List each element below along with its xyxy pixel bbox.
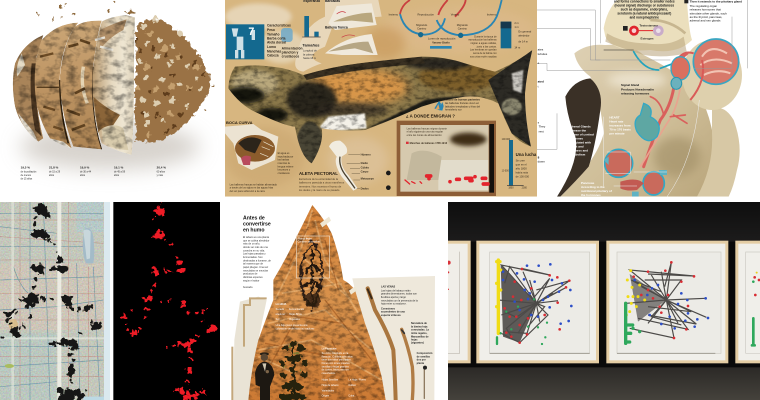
bread percentage labels: de 30 a 44 <box>80 172 92 174</box>
leaf text block: la floración: Flores con tonos rosados, <box>322 362 351 365</box>
intro text: mezcladas se mezclan <box>243 269 269 272</box>
framed map with sightings: Las ballenas francas migran durante <box>407 127 447 130</box>
statue: body <box>560 45 714 197</box>
bread loaf slices <box>13 15 135 155</box>
leaf text block: la hoja: Vegetales <box>289 318 301 321</box>
bread percentage labels: años <box>114 174 120 177</box>
framed map with sightings <box>397 121 496 196</box>
leaf text block: la floración: tiene dos tallos principales. <box>322 359 352 362</box>
baleen caption: a través de los siglos en las aguas frías <box>230 187 274 190</box>
leaf midrib sticks <box>368 288 427 400</box>
baleen caption: crustáceos <box>278 172 290 175</box>
bread percentage labels: de 15 años <box>21 177 33 180</box>
framed plot B <box>606 241 728 363</box>
intro text: distintas especies <box>243 276 263 279</box>
left edge text fragments: rest <box>539 129 544 133</box>
notes beside sticks: mitra regalos, <box>411 332 428 335</box>
label: signal gland: Produces Noradrenalin <box>621 87 654 91</box>
bread percentage labels: de 15 a 29 <box>49 172 61 174</box>
panel: gallery wall with framed plots <box>441 202 760 400</box>
panel: bread data sculpture <box>13 2 213 180</box>
notes beside sticks: conectadas. La <box>411 329 430 332</box>
heart <box>635 103 659 141</box>
bread percentage labels: de menos <box>21 175 32 177</box>
venn labels: Invierno <box>487 12 497 16</box>
left edge text fragments <box>538 48 548 164</box>
pituitary caption: stimulate other glands, such <box>690 11 727 15</box>
baleen mouth illustration <box>225 120 278 170</box>
label: signal gland: releasing hormones <box>621 92 650 96</box>
text block: las venas <box>381 285 418 317</box>
text block: las venas: grandes dimensiones, todas son <box>381 293 417 296</box>
framed map with sightings: Manchas de ballenas 1785-1913 <box>410 142 448 145</box>
blue poster with figures: 7 <box>248 26 254 38</box>
torn paper right <box>352 276 435 400</box>
intro text: donde ser más de una <box>243 246 268 249</box>
parchment stains <box>225 0 535 187</box>
text block right of venn <box>468 35 497 58</box>
caption over head <box>614 0 675 20</box>
statue: dark arm in shadow <box>557 78 601 197</box>
label: heart: per minute <box>609 132 625 136</box>
heading: where they migrate: ¿ A DONDE EMIGRAN ? <box>406 113 455 118</box>
label: adrenal glands <box>569 124 594 156</box>
label: heart <box>609 116 631 136</box>
side caption text: Alimentación <box>282 46 303 50</box>
bread percentage labels: de la población <box>21 172 37 174</box>
notes beside sticks <box>411 322 433 365</box>
baleen caption: del sur para sobrevivir a la caza <box>230 190 265 193</box>
left edge text fragments: t <box>538 84 539 88</box>
leaf text block: la floración: Variedades <box>322 389 335 392</box>
heading: Antes de convertirse en humo: Antes de <box>243 215 265 221</box>
leaf text block: la floración: Cultivo <box>348 384 357 387</box>
fin bone illustration: Radio <box>361 161 368 165</box>
small bar chart: Longitud de <box>303 49 317 53</box>
venn labels: Lorem de reproducción <box>428 36 456 40</box>
label: adrenal glands: Increase the <box>569 128 586 132</box>
venn labels: Invierno <box>389 12 399 16</box>
statue: head <box>604 0 692 51</box>
text block: las venas: Conexiones <box>381 307 396 310</box>
pectoral fin text: Estructura de la extremidad de la <box>299 177 339 181</box>
tall bar chart: año 1800 <box>516 166 527 170</box>
bread percentage labels: de 45 a 59 <box>114 172 126 174</box>
baleen caption <box>230 152 294 193</box>
text block right of venn: cerca de la bahía con <box>473 52 497 55</box>
label: pancreas <box>581 181 612 197</box>
text block right of venn: reproducción las ballenas <box>468 39 497 42</box>
baleen caption: El agua es <box>278 152 290 155</box>
blue label bar <box>430 46 452 49</box>
tobacco plant illustration <box>282 344 305 400</box>
label: heart: 70 to 170 beats <box>609 128 631 132</box>
side caption text: Características <box>267 24 291 28</box>
leaf text block: la hoja: Hojas Brisa <box>289 313 302 316</box>
tall bar chart <box>502 139 537 190</box>
fin bone illustration: Húmero <box>361 153 371 157</box>
depth bar chart: alrededor <box>518 34 530 38</box>
left edge text fragments: e <box>538 61 540 65</box>
bread percentage labels: años <box>80 174 86 177</box>
intro text: buscado. <box>243 286 253 289</box>
frame shadows <box>448 242 760 367</box>
bread shadow <box>20 123 200 170</box>
leaf text block: la hoja: Una hoja joven presenta una <box>276 324 308 327</box>
baleen caption: los peces y <box>278 169 291 172</box>
leaf text block: la floración: floración. Cultivos más altos <box>322 355 353 358</box>
notes beside sticks: Nervadura de <box>411 322 427 325</box>
venn labels: Verano-Otoño <box>432 40 450 44</box>
leaf text block: la floración: La Floración <box>322 347 337 350</box>
heading: Antes de convertirse en humo <box>243 215 271 234</box>
venn labels: Verano <box>451 12 460 16</box>
seals note with icon: Mucho de buenas parientes <box>445 98 481 102</box>
bread percentage labels <box>21 165 166 180</box>
leaf text block: la floración: de cortes, listos para ser <box>322 369 349 372</box>
baleen mouth illustration: BOCA CURVA <box>226 120 253 125</box>
label: adrenal glands: stress and <box>569 144 584 148</box>
bread percentage labels: 21,8 % <box>49 165 59 169</box>
text block: las venas: especie virtuosa <box>381 314 401 317</box>
leaf text block: la floración: Cuba <box>348 395 355 398</box>
statue: right leg <box>697 108 740 197</box>
intro text: papel pliegan. Una vez <box>243 266 269 269</box>
caption over head: serotonin (a natural antidepressant) <box>617 12 671 16</box>
label: adrenal glands: hormones <box>569 136 583 140</box>
farmer figure <box>255 352 274 400</box>
bread percentage labels: 19,5 % <box>21 165 30 169</box>
panel: red clusters on black <box>113 202 220 400</box>
whale skull illustrations <box>325 0 378 55</box>
bread percentage labels: años <box>49 174 55 177</box>
leaf text block: la hoja: Secado <box>276 308 285 311</box>
pectoral fin text: ballena es parecida a otros mamíferos <box>299 181 345 185</box>
venn diagram circles <box>400 0 502 38</box>
fin bone illustration: Metacarpo <box>361 176 374 180</box>
leaf text block: la floración: semillas y hojas grandes <box>322 365 350 368</box>
pituitary caption <box>684 0 742 23</box>
pituitary caption: The regulating organ <box>690 4 718 8</box>
venn labels <box>389 12 497 44</box>
heading: pectoral fin: ALETA PECTORAL <box>299 171 338 176</box>
pituitary caption: adrenal and sex glands <box>690 19 721 23</box>
dark gallery wall <box>448 202 760 400</box>
fin bone illustration <box>329 141 374 191</box>
baleen caption: Las ballenas francas se habían alimentado <box>230 183 278 186</box>
intro text: destinadas a fumarse, de <box>243 259 272 262</box>
notes beside sticks: de semillas <box>417 355 431 358</box>
label: pancreas: According to the <box>581 185 605 189</box>
text block: las venas: flexibles aporta y largo <box>381 296 406 299</box>
white label box on flower: Flor y fruto <box>298 236 312 240</box>
panel: tobacco leaf anatomy <box>225 200 435 400</box>
bread percentage labels: 20,4 % <box>157 165 166 169</box>
notes beside sticks: planta <box>417 362 425 365</box>
tall bar chart: que en el <box>516 162 527 166</box>
venn labels: Migrando <box>416 23 428 27</box>
blue poster with figures <box>226 24 264 59</box>
leaf text block: la floración: Hojas Semillas <box>322 379 339 382</box>
leaf text block: la hoja: Fermentación <box>289 308 305 311</box>
pectoral fin text <box>299 178 344 192</box>
bread slice 2 <box>35 23 78 148</box>
caption over head: (neural signal) discharge or substances <box>615 4 674 8</box>
white label box on flower: Contiene las semillas <box>298 241 320 244</box>
seals note with icon <box>434 98 480 111</box>
intro text: Las hojas pasadas y <box>243 253 266 256</box>
bread slice 4 front <box>93 15 135 155</box>
side caption text: Manchas <box>267 49 281 53</box>
torn paper left <box>233 297 267 400</box>
pituitary caption: releases hormones that <box>690 8 721 12</box>
label: heart: HEART <box>609 116 620 120</box>
partial frame right <box>735 241 760 363</box>
intro text: según el sabor <box>243 279 259 282</box>
notes beside sticks: (zigzantes) <box>411 341 424 344</box>
tall bar chart: Se cree <box>516 158 525 162</box>
red clusters of points <box>125 207 213 397</box>
leaf shape <box>225 200 392 400</box>
label: adrenal glands: Adrenal Glands <box>569 124 591 128</box>
crumbled bread portion <box>37 2 213 142</box>
intro text <box>243 236 272 289</box>
small bar chart <box>302 0 321 60</box>
notes beside sticks: hojas <box>411 339 418 342</box>
text block: las venas: ascendentes de una <box>381 311 405 314</box>
baleen caption: las barbas <box>278 159 290 162</box>
flower pod illustration <box>300 242 322 308</box>
side caption text: Cabeza <box>267 54 279 58</box>
label: pancreas: Pancreas <box>581 181 595 185</box>
tall bar chart: de 100 000 <box>516 174 529 178</box>
text block right of venn: junto a las costas. <box>476 45 497 48</box>
panel: map with black clusters <box>0 202 110 400</box>
baleen caption: lengua retiene <box>278 165 294 168</box>
right whale body <box>228 50 532 164</box>
label: adrenal glands: alertness and <box>569 148 588 152</box>
pectoral fin text: terrestres. Nos muestra el hueso de <box>299 184 342 188</box>
notes beside sticks: la lámina hoja <box>411 325 428 328</box>
label: pancreas: the hormones <box>581 193 601 197</box>
text block right of venn: Durante la época de <box>474 35 497 38</box>
depth bar chart: 1 m <box>514 25 520 29</box>
bread percentage labels: y más <box>157 175 164 177</box>
heading: Antes de convertirse en humo: convertirse <box>243 222 271 228</box>
baleen caption: mientras la <box>278 162 290 165</box>
side caption text: plancton y <box>282 50 298 54</box>
tall bar chart: 1800 <box>508 188 514 190</box>
white annotation lines <box>604 100 699 197</box>
bread slice 1 <box>13 35 43 142</box>
text block: las venas: Las hojas del tabaco están <box>381 289 411 292</box>
map printed detail noise <box>0 202 110 400</box>
bread slice 3 <box>60 21 102 149</box>
black background <box>113 202 220 400</box>
leaf text block: la floración: La Hoja / Flores <box>348 379 367 382</box>
label: pancreas: nutritional pituitary of <box>581 189 612 193</box>
tan bracket decorations <box>232 298 267 400</box>
side caption text: Peso <box>267 28 275 32</box>
left edge text fragments: tubules <box>538 52 548 56</box>
side caption text: crustáceos <box>282 54 299 58</box>
bread percentage labels: 19,9 % <box>80 165 90 169</box>
left edge text fragments: ates <box>538 48 544 52</box>
intro text: productos de <box>243 273 258 276</box>
leaf text block: la hoja <box>276 303 315 330</box>
caption over head: and norepinephrine <box>630 16 659 20</box>
depth bar chart: 14 m <box>514 46 521 50</box>
hormone molecules: Testosterone <box>639 24 658 28</box>
label: adrenal glands: release of cortisol <box>569 132 594 136</box>
left edge text fragments: They <box>539 124 546 128</box>
left edge text fragments: ated <box>538 79 544 83</box>
intro text: más de un año, <box>243 243 260 246</box>
venn labels: Camino <box>417 26 427 30</box>
tall bar chart: 10 000 <box>502 170 509 172</box>
intro text: que se cultiva alrededor <box>243 239 270 242</box>
side caption text <box>267 24 303 58</box>
seals note with icon: las ballenas francas viven en <box>445 101 480 105</box>
baleen caption: expulsada por <box>278 155 293 158</box>
side caption text: Lomo <box>267 45 276 49</box>
label: signal gland: Signal Gland <box>621 83 639 87</box>
seals note with icon: hemisferio sur <box>445 108 462 112</box>
leaf text block: la floración: Hoja de tabaco <box>322 384 339 387</box>
leaf text block: la hoja: coloración verde hasta su madurez <box>276 327 315 330</box>
depth bar chart: de 14 m <box>518 40 529 44</box>
side caption text: Aleta dorsal <box>267 41 286 45</box>
blue plankton icon <box>281 28 293 42</box>
venn labels: Reproducción <box>417 12 434 16</box>
fin bone illustration: Cúbito <box>361 165 369 169</box>
notes beside sticks: Composición <box>417 352 433 355</box>
label: heart: Heart rate <box>609 120 624 124</box>
side caption text: Tamaño <box>267 32 280 36</box>
intro text: fermentadas. Son <box>243 256 263 259</box>
small bar chart: hasta 18 m <box>303 56 317 60</box>
pituitary caption: as the thyroid, pancreas, <box>690 15 723 19</box>
tall bar chart: había más <box>516 170 529 174</box>
left edge text fragments: down <box>538 160 545 164</box>
parchment background <box>225 0 537 197</box>
map road lines <box>0 202 103 400</box>
hormone molecules <box>623 24 664 40</box>
text block right of venn: migran a aguas cálidas, <box>470 42 497 45</box>
map sheet folds and lake <box>0 202 110 400</box>
tape pieces <box>320 217 357 295</box>
text block: las venas: LAS VENAS <box>381 285 396 288</box>
kidneys and pancreas <box>604 149 667 197</box>
label: adrenal glands: metabolism <box>569 152 586 156</box>
hormone molecules: Estrogen <box>641 36 654 40</box>
framed plot A <box>476 241 599 363</box>
bread percentage labels: 60 años <box>157 171 166 174</box>
label: heart: increases from <box>609 124 631 128</box>
leaf text block: la hoja: Madurez <box>276 313 286 316</box>
panel: right whale anatomy <box>225 0 537 197</box>
small bar chart: la cabeza <box>303 52 315 56</box>
intro text: tal manera que de <box>243 263 264 266</box>
heading: Antes de convertirse en humo: en humo <box>243 228 264 234</box>
notes beside sticks: Manzanillas de <box>411 335 429 338</box>
tall bar chart: Una lucha <box>516 152 537 157</box>
map base <box>0 202 110 400</box>
caption over head: such as dopamine, endorphins, <box>621 8 668 12</box>
text block right of venn: Las hembras se quedan <box>470 49 497 52</box>
left edge text fragments: s <box>538 120 540 124</box>
map colour regions <box>0 202 110 400</box>
fin bone illustration: Carpo <box>361 170 369 174</box>
seals note with icon: latitudes templadas y frías del <box>445 104 481 108</box>
text block right of venn: sus crías recién nacidas <box>470 55 497 58</box>
framed map with sightings: el año siguiendo una ruta regular <box>407 131 443 134</box>
whale skull illustrations: Ballena franca <box>325 25 348 29</box>
leaf text block: la floración <box>322 347 367 398</box>
notes beside sticks: dos por <box>417 359 426 362</box>
statue: skull with brain <box>677 39 742 110</box>
panel: stress anatomy on statue <box>537 0 748 197</box>
leaf text block: la floración: Origen <box>322 395 330 398</box>
label: signal gland <box>621 83 654 96</box>
white label box on flower <box>296 236 330 278</box>
pituitary and adrenal signal nodes <box>671 57 690 89</box>
intro text: cosecha en su vida. <box>243 249 265 252</box>
label: adrenal glands: associated with <box>569 140 591 144</box>
arteries and veins <box>634 52 687 167</box>
tall bar chart: 2000 <box>522 188 528 190</box>
fin bone illustration: Dedos <box>361 186 369 190</box>
leaf text block: la floración: Su ciclo, concluido en la <box>322 352 349 355</box>
depth bar chart: En general <box>518 30 532 34</box>
depth bar chart <box>501 21 532 50</box>
left edge text fragments: 8 <box>538 156 540 160</box>
framed map with sightings: entre las zonas de alimentación <box>407 134 442 137</box>
small bar chart: Tamaños <box>302 43 320 48</box>
side caption text: Barba corta <box>267 36 286 40</box>
leader lines <box>537 0 748 149</box>
statue: body mottling <box>607 72 700 177</box>
leaf text block: la floración: cosechados. <box>322 372 336 375</box>
pectoral fin text: los dedos y la mano de su pasado <box>299 188 340 192</box>
leaf text block: la hoja: LA HOJA <box>276 303 287 306</box>
black clusters of points <box>3 207 98 397</box>
depth bar chart: 2 m <box>514 21 520 25</box>
text block: las venas: mezcladas con la presencia de la <box>381 299 418 302</box>
bread percentage labels: 19,1 % <box>114 165 124 169</box>
venn labels: Camino <box>458 26 467 30</box>
tall bar chart: 100 000 <box>502 139 511 141</box>
venn labels: Migrando <box>457 23 468 27</box>
partial frame left <box>441 241 471 363</box>
text block: las venas: hoja entre su madurez. <box>381 303 407 306</box>
bullet markers <box>386 171 391 190</box>
leaf text block: la hoja: Sol <box>276 318 280 321</box>
intro text: El tabaco es una planta <box>243 236 270 239</box>
